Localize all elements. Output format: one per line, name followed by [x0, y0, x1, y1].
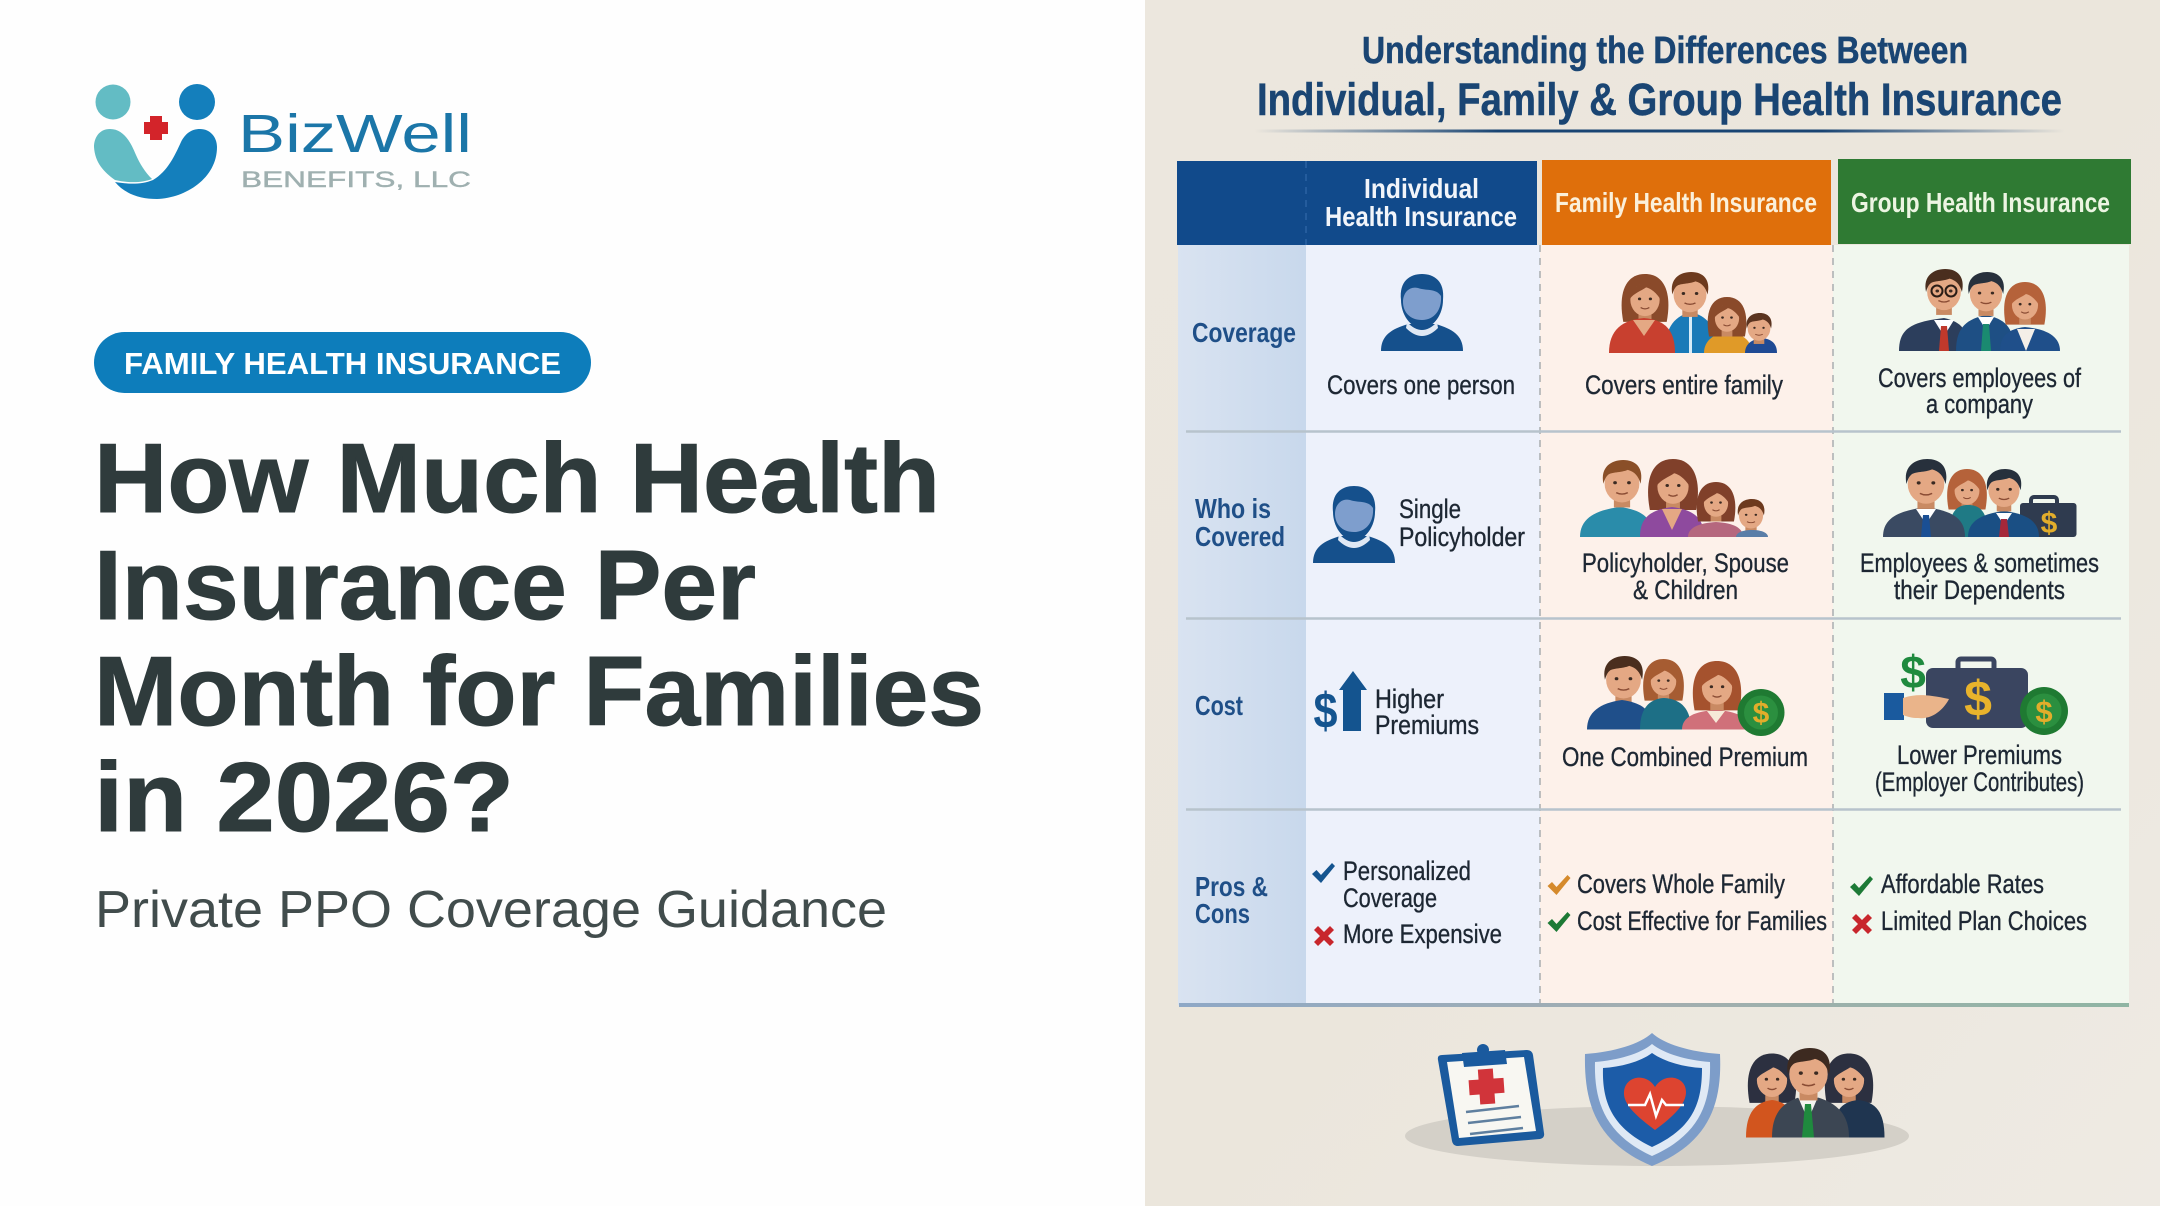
text: single policyholder: Policyholder [1399, 522, 1525, 552]
pros and cons: group: Affordable Rates [1881, 869, 2044, 899]
icon: employer contribution: $ [1964, 671, 1992, 727]
icon: shield with heart [1585, 1033, 1720, 1166]
column header: group: Group Health Insurance [1851, 187, 2110, 218]
pros and cons: group [1850, 869, 2087, 936]
panel title: Understanding the Differences Between [1362, 30, 1968, 72]
row label: pros and cons: Pros & [1195, 871, 1268, 902]
text: policyholder, spouse and children: & Children [1633, 575, 1738, 605]
text: one combined premium: One Combined Premium [1562, 742, 1808, 772]
icon: employees and dependents: $ [2041, 507, 2058, 540]
text: employees and dependents [1860, 548, 2099, 605]
subtitle: Private PPO Coverage Guidance [95, 881, 887, 939]
icon: dollar with up arrow [1314, 671, 1367, 739]
main heading: How Much Health [94, 423, 940, 533]
icon: three professionals [1746, 1048, 1884, 1138]
icon: medical clipboard [1438, 1044, 1544, 1146]
icon: policyholder, spouse and children [1580, 459, 1768, 537]
icon: ground shadow [1405, 1106, 1909, 1166]
text: policyholder, spouse and children: Policyholder, Spouse [1582, 548, 1789, 578]
icon: employees and dependents [1883, 459, 2076, 540]
panel: comparison infographic [1145, 0, 2160, 1206]
text: lower premiums [1875, 740, 2084, 797]
icon: family with coin: $ [1753, 697, 1770, 730]
column header: group [1838, 159, 2131, 244]
row label: who is covered [1195, 493, 1285, 552]
row label: cost: Cost [1195, 690, 1243, 721]
logo: BizWell Benefits [94, 84, 472, 199]
row label: pros and cons [1195, 871, 1268, 929]
pros and cons: individual [1312, 856, 1502, 949]
pros and cons: family [1548, 869, 1827, 936]
column header: individual [1177, 161, 1537, 245]
text: higher premiums [1375, 684, 1479, 740]
table backgrounds [1178, 245, 2129, 1007]
text: lower premiums: Lower Premiums [1897, 740, 2062, 770]
main heading: Month for Families [94, 636, 984, 746]
icon: single policyholder [1313, 486, 1395, 563]
icon: employer contribution: $ [1900, 646, 1926, 698]
text: higher premiums: Higher [1375, 684, 1444, 714]
column header: individual: Individual [1364, 173, 1479, 204]
column header: family: Family Health Insurance [1555, 187, 1817, 218]
icon: employer contribution: $ [2035, 694, 2053, 729]
pros and cons: individual: Personalized [1343, 856, 1471, 886]
text: covers employees of a company [1878, 363, 2081, 419]
icon: employees coverage [1899, 269, 2060, 351]
text: policyholder, spouse and children [1582, 548, 1789, 605]
badge: family health insurance [94, 332, 591, 393]
text: covers employees of a company: a company [1926, 389, 2033, 419]
row label: pros and cons: Cons [1195, 898, 1250, 929]
text: covers employees of a company: Covers employees of [1878, 363, 2081, 393]
text: employees and dependents: their Dependents [1894, 575, 2065, 605]
text: employees and dependents: Employees & sometimes [1860, 548, 2099, 578]
row label: who is covered: Covered [1195, 521, 1285, 552]
pros and cons: individual: Coverage [1343, 883, 1437, 913]
icon: family coverage [1609, 272, 1777, 353]
icon: single person coverage [1381, 274, 1463, 351]
icon: employer contribution [1884, 646, 2068, 735]
row label: who is covered: Who is [1195, 493, 1271, 524]
text: single policyholder: Single [1399, 494, 1461, 524]
tagline: BENEFITS, LLC [241, 167, 471, 192]
icon: dollar with up arrow: $ [1314, 683, 1338, 739]
badge: family health insurance: FAMILY HEALTH INSURANCE [124, 346, 561, 381]
pros and cons: family: Cost Effective for Families [1577, 906, 1827, 936]
main heading [94, 423, 984, 852]
text: covers one person: Covers one person [1327, 370, 1515, 400]
text: lower premiums: (Employer Contributes) [1875, 767, 2084, 797]
icon: family with coin [1587, 656, 1784, 736]
main heading: Insurance Per [94, 530, 756, 640]
text: single policyholder [1399, 494, 1525, 552]
wordmark: BizWell [238, 104, 472, 164]
pros and cons: individual: More Expensive [1343, 919, 1502, 949]
column header: individual: Health Insurance [1325, 201, 1517, 232]
text: higher premiums: Premiums [1375, 710, 1479, 740]
text: covers entire family: Covers entire family [1585, 370, 1783, 400]
logo mark [94, 84, 217, 199]
pros and cons: group: Limited Plan Choices [1881, 906, 2087, 936]
column header: family [1542, 160, 1831, 245]
pros and cons: family: Covers Whole Family [1577, 869, 1785, 899]
main heading: in 2026? [94, 742, 514, 852]
panel title [1255, 30, 2065, 132]
row label: coverage: Coverage [1192, 317, 1296, 348]
